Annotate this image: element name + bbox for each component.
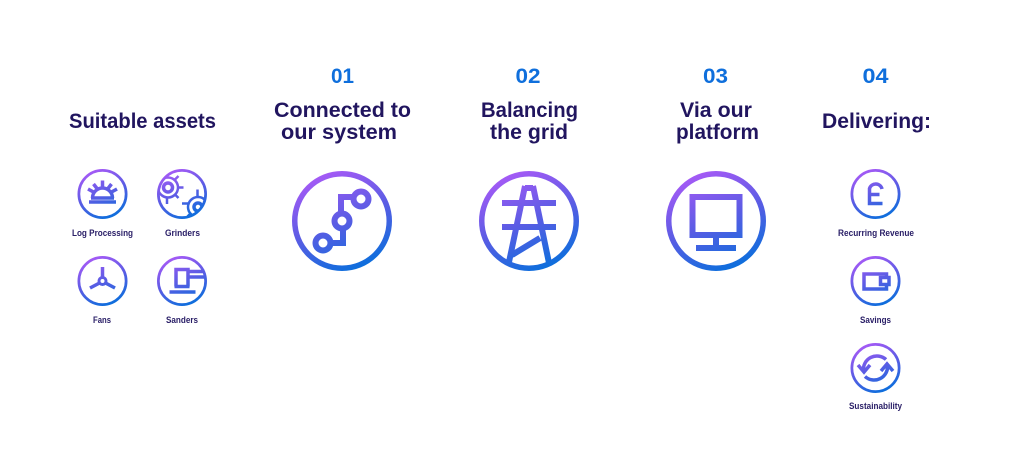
label: recurring revenue: Recurring Revenue [838,228,914,238]
column: step 03 [669,65,763,268]
number: 02: 02 [516,65,540,88]
column: suitable assets [69,110,216,325]
label: savings: Savings [860,315,891,325]
heading: via our platform: Via our [680,99,752,122]
icon: pound [852,170,899,218]
column: step 03: platform [676,121,759,144]
label: sanders: Sanders [166,315,198,325]
icon: sanders [158,257,206,305]
icon: sustainability [852,344,899,392]
heading: balancing the grid: Balancing [481,99,578,122]
column: step 02: the grid [490,121,568,144]
column: step 04 [822,65,931,411]
column: step 01: our system [281,121,397,144]
number: 03: 03 [703,65,728,88]
column: step 01 [274,65,411,268]
heading: delivering: Delivering: [822,110,931,133]
number: 04: 04 [862,65,889,88]
icon: connected nodes [295,174,389,268]
label: grinders: Grinders [165,228,200,238]
heading: suitable assets: Suitable assets [69,110,216,133]
label: log processing: Log Processing [72,228,133,238]
icon: fans [79,257,126,305]
icon: monitor [669,174,763,268]
icon: wallet [852,257,899,305]
icon: log processing [79,170,126,218]
icon: pylon [482,174,576,268]
label: fans: Fans [93,315,111,325]
column: step 02 [481,65,578,268]
number: 01: 01 [331,65,354,88]
label: sustainability: Sustainability [849,401,902,411]
heading: connected to our system: Connected to [274,99,411,122]
icon: grinders [158,170,208,218]
